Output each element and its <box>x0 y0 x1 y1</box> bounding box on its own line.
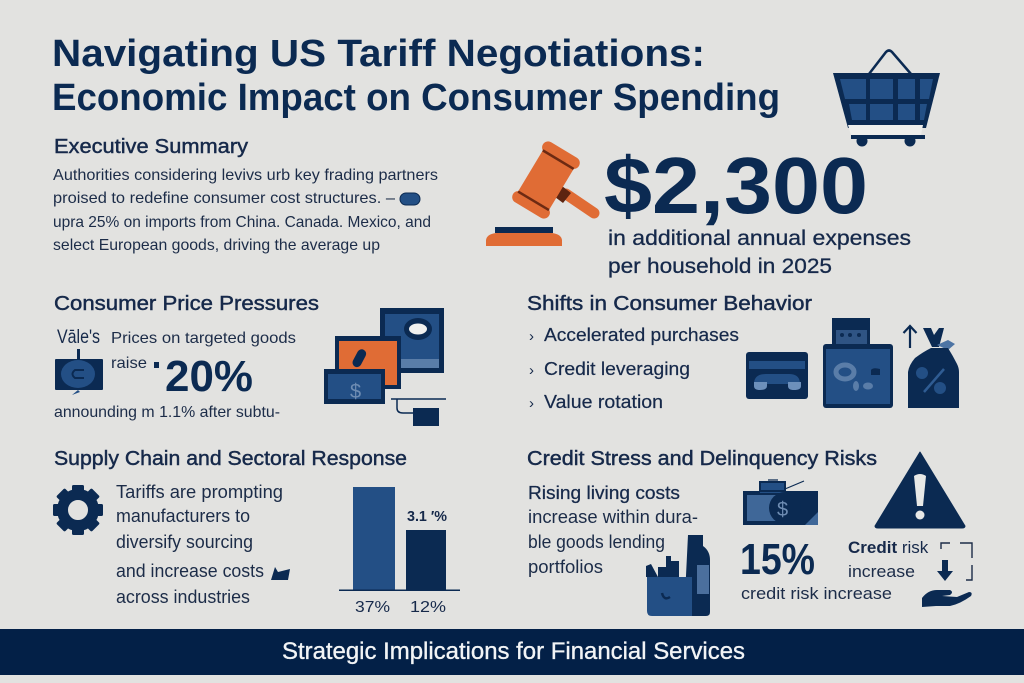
bar chart: 3.1 ′% <box>407 508 447 525</box>
icon: hand with down arrow <box>922 543 972 607</box>
text: brand label: Vāle's <box>57 327 100 348</box>
title <box>52 33 780 119</box>
bar chart: 12% <box>410 599 446 616</box>
stat: 15 percent: 15% <box>740 535 815 584</box>
text block: rising living costs <box>528 483 698 577</box>
heading: supply chain: Supply Chain and Sectoral Response <box>54 448 407 470</box>
icon: gear <box>53 485 103 535</box>
icon: shopping basket <box>833 50 940 146</box>
text block: executive summary body: upra 25% on imports from China. Canada. Mexico, and <box>53 214 431 231</box>
icon: price monitors: $ <box>350 381 361 403</box>
footer banner <box>0 629 1024 675</box>
footer banner: Strategic Implications for Financial Services <box>282 638 745 665</box>
title: Economic Impact on Consumer Spending <box>52 77 780 119</box>
text: credit risk side note: Credit risk <box>848 538 929 557</box>
bar chart: 37% <box>355 599 390 616</box>
panel: shifts in consumer behavior <box>527 293 959 412</box>
text block: tariffs: Tariffs are prompting <box>116 482 283 502</box>
icon: grocery bag and bottle <box>646 535 710 616</box>
bar chart <box>339 487 460 616</box>
heading: shifts in consumer behavior: Shifts in Consumer Behavior <box>527 293 812 315</box>
stat: 20 percent: 20% <box>165 352 253 401</box>
icon: package box <box>823 318 893 408</box>
text block: tariffs: manufacturers to <box>116 506 250 526</box>
text: credit risk increase: credit risk increase <box>741 584 892 603</box>
heading: credit stress: Credit Stress and Delinquency Risks <box>527 448 877 470</box>
heading: consumer price pressures: Consumer Price Pressures <box>54 293 319 315</box>
icon: price monitors <box>324 308 446 426</box>
text block: rising living costs: ble goods lending <box>528 532 665 552</box>
text: raise: raise <box>111 355 147 372</box>
text block: tariffs: across industries <box>116 587 250 607</box>
panel: supply chain and sectoral response <box>53 448 460 616</box>
text block: executive summary body: Authorities considering levivs urb key frading partners <box>53 167 438 184</box>
panel: executive summary <box>53 136 438 254</box>
list: behavior shifts: › <box>529 362 534 379</box>
icon: money stack: $ <box>777 499 788 521</box>
icon: credit card <box>746 352 808 399</box>
list: behavior shifts: Credit leveraging <box>544 359 690 379</box>
icon: gavel <box>486 139 594 246</box>
icon: coin display <box>55 349 103 395</box>
title: Navigating US Tariff Negotiations: <box>52 33 705 75</box>
panel: consumer price pressures <box>54 293 446 426</box>
text block: rising living costs: Rising living costs <box>528 483 680 503</box>
heading: executive summary: Executive Summary <box>54 136 248 158</box>
text block: executive summary body: proised to redefine consumer cost structures. – <box>53 190 395 207</box>
list: behavior shifts: › <box>529 328 534 345</box>
arrow: up <box>904 326 916 348</box>
text block: rising living costs: portfolios <box>528 557 603 577</box>
text block: tariffs <box>116 482 283 607</box>
list: behavior shifts: Accelerated purchases <box>544 325 739 345</box>
callout: household cost: in additional annual expenses <box>608 227 911 250</box>
text block: rising living costs: increase within dura- <box>528 507 698 527</box>
callout: household cost <box>604 141 911 278</box>
text: credit risk side note: increase <box>848 562 915 581</box>
callout: household cost: per household in 2025 <box>608 255 832 278</box>
text block: tariffs: diversify sourcing <box>116 532 253 552</box>
list: behavior shifts <box>529 325 739 412</box>
text block: tariffs: and increase costs <box>116 561 264 581</box>
icon: discount bag <box>908 328 959 408</box>
callout: household cost: $2,300 <box>604 141 868 230</box>
icon: folder <box>271 567 290 580</box>
text block: executive summary body: select European goods, driving the average up <box>53 237 380 254</box>
text: credit risk side note <box>848 538 929 581</box>
panel: credit stress and delinquency risks <box>527 448 972 616</box>
list: behavior shifts: › <box>529 395 534 412</box>
list: behavior shifts: Value rotation <box>544 392 663 412</box>
icon: money stack <box>743 480 818 525</box>
text: prices on targeted goods: Prices on targeted goods <box>111 330 296 347</box>
text block: executive summary body <box>53 167 438 254</box>
icon: warning triangle <box>875 452 965 528</box>
text: announcement note: announding m 1.1% after subtu- <box>54 404 280 421</box>
